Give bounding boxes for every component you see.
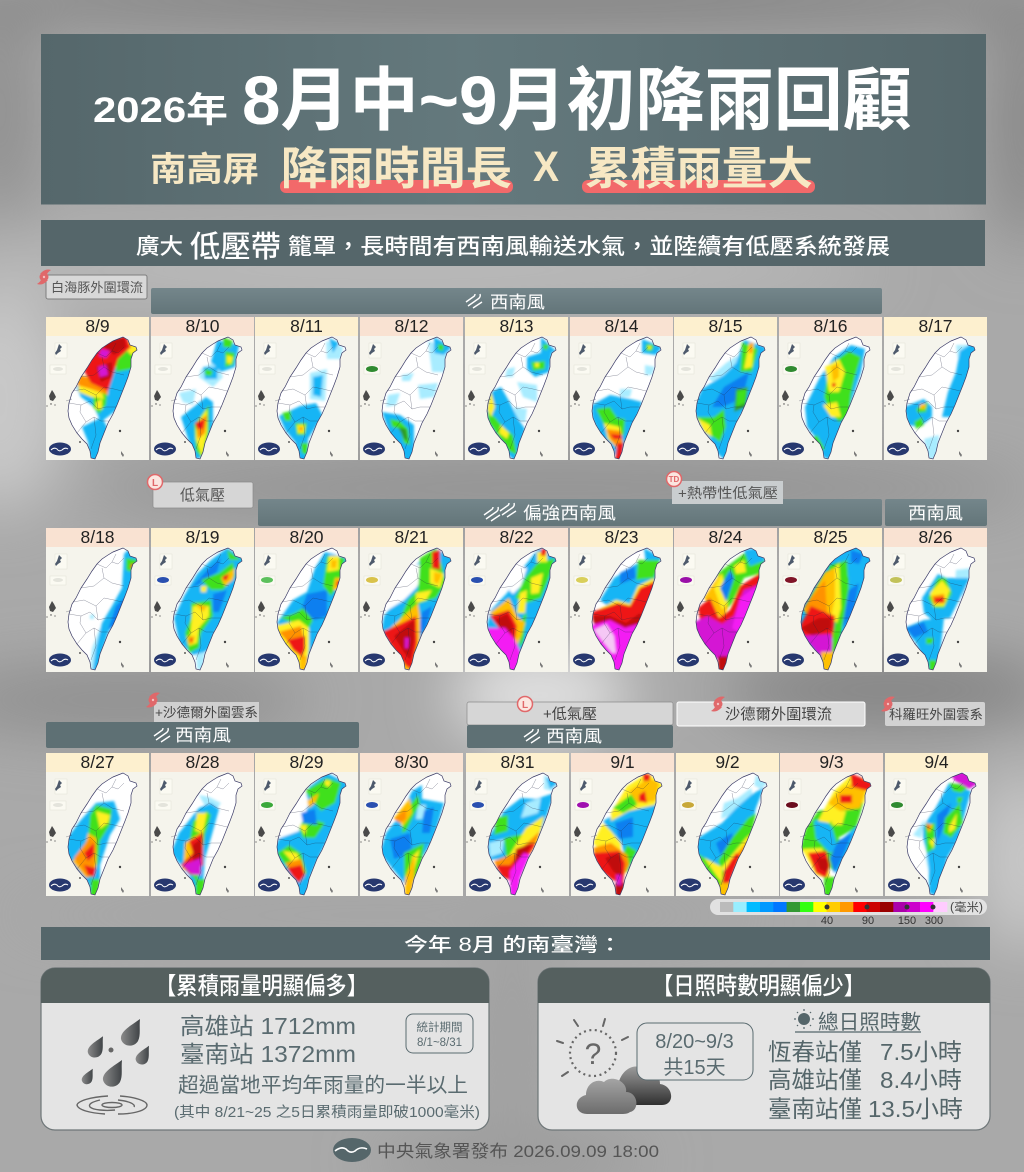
map: 8/17 <box>884 316 987 460</box>
map: 8/29 <box>255 752 358 897</box>
colour scale legend: 40 <box>821 915 833 927</box>
map: 8/13: 8/13 <box>499 316 534 336</box>
label: 低氣壓 8/31: +低氣壓 <box>543 706 597 723</box>
map: 8/28 <box>151 752 254 897</box>
rainfall figures: 臺南站 1372mm <box>180 1041 356 1067</box>
map: 8/16: 8/16 <box>813 316 848 336</box>
map: 8/10: 8/10 <box>185 316 220 336</box>
label: 低氣壓: L <box>152 478 158 489</box>
panel heading: 【日照時數明顯偏少】 <box>652 973 865 1000</box>
colour scale legend: 150 <box>898 915 916 927</box>
bar: 西南風 8/31 <box>467 725 673 748</box>
station sunshine hours: 7.5小時 <box>880 1039 962 1065</box>
map: 8/19: 8/19 <box>185 527 220 547</box>
rainfall figures: (其中 8/21~25 之5日累積雨量即破1000毫米) <box>174 1103 480 1121</box>
map: 9/3 <box>780 752 883 897</box>
label: 低氣壓 8/31 <box>467 696 673 725</box>
bar: 西南風 8/26: 西南風 <box>908 504 963 523</box>
bar: 西南風: 西南風 <box>490 293 545 312</box>
summary banner <box>41 220 985 266</box>
map: 8/14 <box>570 316 673 461</box>
map: 8/20 <box>255 527 358 672</box>
bar: 西南風 8/27: 西南風 <box>175 726 231 745</box>
label: 沙德爾外圍雲系 <box>146 692 259 723</box>
map: 8/27 <box>46 752 149 897</box>
subtitle underlines <box>280 180 815 193</box>
icon: rain drops and ripples <box>77 1019 149 1114</box>
bar: 西南風 8/31: 西南風 <box>546 727 602 746</box>
map: 8/25 <box>779 527 882 672</box>
map: 9/1 <box>571 752 674 897</box>
summary banner: 廣大 <box>136 234 183 259</box>
subtitle: 南高屏 <box>150 151 259 189</box>
stats period box: 統計期間 <box>416 1020 462 1034</box>
period box: 8/20~9/3 <box>655 1031 734 1053</box>
rainfall figures: 超過當地平均年雨量的一半以上 <box>178 1074 468 1097</box>
map: 9/1: 9/1 <box>610 752 635 772</box>
map: 8/30 <box>360 752 463 897</box>
map: 8/29: 8/29 <box>289 752 324 772</box>
map: 8/10 <box>151 316 254 460</box>
station sunshine hours: 高雄站僅 <box>768 1067 862 1093</box>
map: 8/21: 8/21 <box>394 527 429 547</box>
map row 3 <box>46 752 988 897</box>
icon: hidden sun and clouds <box>557 1019 671 1114</box>
stats period box: 8/1~8/31 <box>417 1037 462 1049</box>
label: 白海豚外圍環流 <box>37 270 147 299</box>
map: 8/19 <box>151 527 254 672</box>
map: 8/24 <box>674 527 777 672</box>
label: 科羅旺外圍雲系 <box>881 696 985 726</box>
bar: 西南風 <box>151 288 882 314</box>
label: 低氣壓: 低氣壓 <box>180 487 225 504</box>
map: 8/11: 8/11 <box>290 316 323 336</box>
map row 2 <box>46 527 987 672</box>
bar: 偏強西南風 <box>258 499 882 526</box>
map: 9/2 <box>676 752 779 897</box>
map: 8/9: 8/9 <box>85 316 110 336</box>
colour scale legend <box>710 899 987 927</box>
colour scale legend: 300 <box>925 915 943 927</box>
main title: 8月中~9月初降雨回顧 <box>242 62 912 139</box>
subtitle: X <box>533 143 559 191</box>
sunshine heading with sun icon: 總日照時數 <box>818 1011 921 1034</box>
colour scale legend: (毫米) <box>950 900 983 914</box>
main title: 2026年 <box>93 91 228 130</box>
summary banner: 低壓帶 <box>190 231 281 264</box>
label: 沙德爾外圍環流: 沙德爾外圍環流 <box>725 705 832 723</box>
map: 8/12: 8/12 <box>394 316 429 336</box>
row 2 system labels <box>148 472 987 526</box>
map: 8/16 <box>779 316 882 461</box>
map: 8/24: 8/24 <box>708 527 743 547</box>
icon: hidden sun and clouds: ? <box>585 1038 601 1071</box>
row 3 system labels <box>46 692 985 748</box>
station sunshine hours: 臺南站僅 <box>768 1096 862 1122</box>
row 1 system labels <box>37 270 882 314</box>
map: 8/14: 8/14 <box>604 316 639 336</box>
label: 熱帶性低氣壓 <box>666 472 783 504</box>
period box: 共15天 <box>663 1056 726 1079</box>
map: 8/22: 8/22 <box>499 527 534 547</box>
map: 8/11 <box>255 316 358 461</box>
bar: 西南風 8/27 <box>46 722 359 748</box>
map: 8/23 <box>570 527 673 672</box>
map: 8/28: 8/28 <box>185 752 220 772</box>
map: 8/18: 8/18 <box>80 527 115 547</box>
map row 1 <box>46 316 987 462</box>
period box <box>637 1023 753 1080</box>
footer credit: 中央氣象署發布 2026.09.09 18:00 <box>377 1142 659 1161</box>
map: 8/13 <box>465 316 568 461</box>
title panel <box>41 34 986 204</box>
panel heading: 【累積雨量明顯偏多】 <box>155 973 368 1000</box>
map: 8/18 <box>46 527 149 672</box>
map: 8/31: 8/31 <box>500 752 535 772</box>
map: 8/27: 8/27 <box>80 752 115 772</box>
map: 9/3: 9/3 <box>819 752 844 772</box>
label: 沙德爾外圍雲系: +沙德爾外圍雲系 <box>155 705 258 720</box>
colour scale legend: 90 <box>862 915 874 927</box>
bar: 西南風 8/26 <box>885 499 987 526</box>
subtitle <box>150 143 813 194</box>
map: 8/15: 8/15 <box>708 316 743 336</box>
label: 沙德爾外圍環流 <box>677 696 865 726</box>
label: 白海豚外圍環流: 白海豚外圍環流 <box>51 280 143 295</box>
map: 9/2: 9/2 <box>715 752 740 772</box>
map: 8/17: 8/17 <box>918 316 953 336</box>
map: 9/4: 9/4 <box>924 752 949 772</box>
section banner <box>41 927 990 960</box>
map: 8/23: 8/23 <box>604 527 639 547</box>
map: 8/9 <box>46 316 149 462</box>
rainfall figures <box>174 1013 480 1121</box>
map: 8/26: 8/26 <box>918 527 953 547</box>
map: 8/31 <box>466 752 569 897</box>
map: 8/21 <box>360 527 463 672</box>
panel: rainfall <box>41 968 489 1130</box>
panel: sunshine <box>538 968 990 1130</box>
map: 9/4 <box>885 752 988 897</box>
stats period box <box>406 1014 473 1053</box>
footer credit <box>333 1138 659 1162</box>
station sunshine hours: 8.4小時 <box>880 1067 962 1093</box>
map: 8/30: 8/30 <box>394 752 429 772</box>
section banner: 今年 8月 的南臺灣： <box>404 934 622 956</box>
map: 8/25: 8/25 <box>813 527 848 547</box>
label: 低氣壓 8/31: L <box>522 700 528 711</box>
map: 8/12 <box>360 316 463 460</box>
station sunshine hours <box>768 1039 963 1122</box>
map: 8/22 <box>465 527 568 672</box>
label: 熱帶性低氣壓: TD <box>669 475 680 484</box>
subtitle: 降雨時間長 <box>281 143 512 194</box>
subtitle: 累積雨量大 <box>585 143 813 194</box>
map: 8/26 <box>884 527 987 672</box>
label: 熱帶性低氣壓: +熱帶性低氣壓 <box>678 485 778 501</box>
summary banner: 籠罩，長時間有西南風輸送水氣，並陸續有低壓系統發展 <box>288 234 890 259</box>
map: 8/15 <box>674 316 777 461</box>
label: 低氣壓 <box>148 474 253 508</box>
bar: 偏強西南風: 偏強西南風 <box>523 504 616 523</box>
station sunshine hours: 恆春站僅 <box>768 1039 862 1065</box>
station sunshine hours: 13.5小時 <box>868 1096 963 1122</box>
rainfall figures: 高雄站 1712mm <box>180 1013 356 1039</box>
map: 8/20: 8/20 <box>289 527 324 547</box>
label: 科羅旺外圍雲系: 科羅旺外圍雲系 <box>889 707 983 722</box>
